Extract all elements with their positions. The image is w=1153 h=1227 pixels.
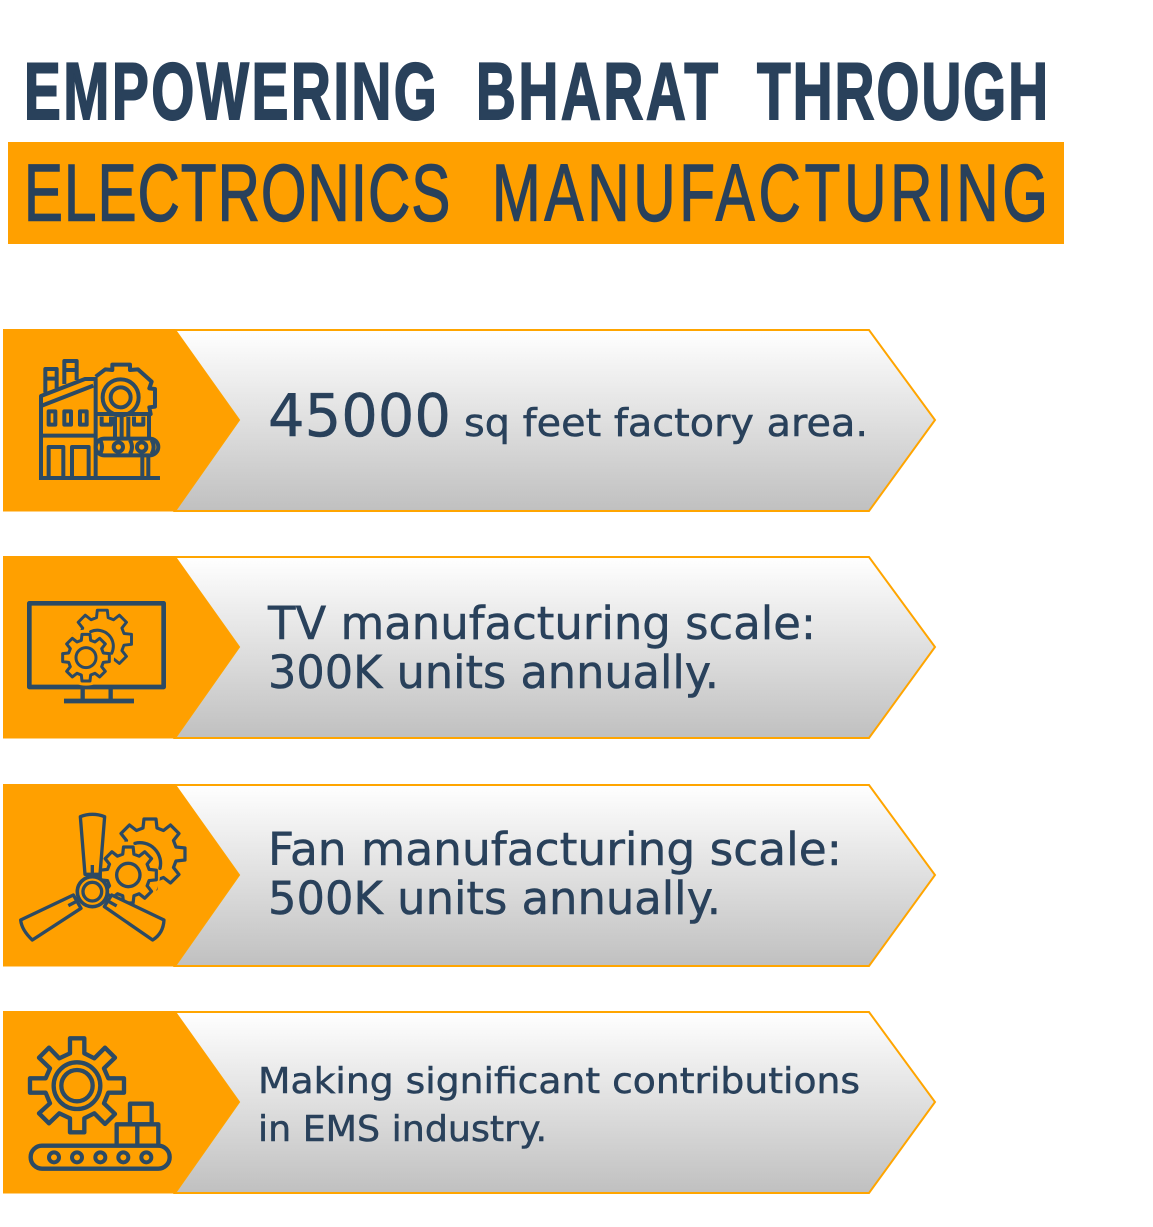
text: EMS contributions <box>258 1061 860 1150</box>
text: TV manufacturing: TV manufacturing scale: <box>267 597 816 650</box>
panel: TV manufacturing <box>3 556 935 738</box>
icon: fan with gears <box>21 814 185 940</box>
title line 1: THROUGH <box>757 45 1048 137</box>
panel: EMS contributions <box>3 1011 935 1194</box>
title line 1: EMPOWERING <box>24 45 437 137</box>
icon: factory with gear <box>39 361 160 478</box>
text: factory area <box>268 381 868 450</box>
text: fan manufacturing: 500K units annually. <box>268 872 721 925</box>
title banner: ELECTRONICS <box>24 147 450 238</box>
text: fan manufacturing: Fan manufacturing scale: <box>268 823 842 876</box>
text: EMS contributions: Making significant contributions <box>258 1061 860 1102</box>
text: fan manufacturing <box>268 823 842 925</box>
title banner: MANUFACTURING <box>492 147 1048 238</box>
icon: gear and conveyor <box>30 1038 170 1169</box>
panel: fan manufacturing <box>3 784 935 966</box>
text: EMS contributions: in EMS industry. <box>258 1109 547 1150</box>
title line 1: BHARAT <box>476 45 718 137</box>
text: factory area: sq feet factory area. <box>464 401 868 445</box>
title banner <box>8 142 1064 244</box>
text: TV manufacturing <box>267 597 816 699</box>
title line 1 <box>24 45 1048 137</box>
text: TV manufacturing: 300K units annually. <box>268 646 719 699</box>
text: factory area: 45000 <box>268 381 451 450</box>
icon: monitor with gears <box>29 603 164 701</box>
panel: factory area <box>3 329 935 512</box>
